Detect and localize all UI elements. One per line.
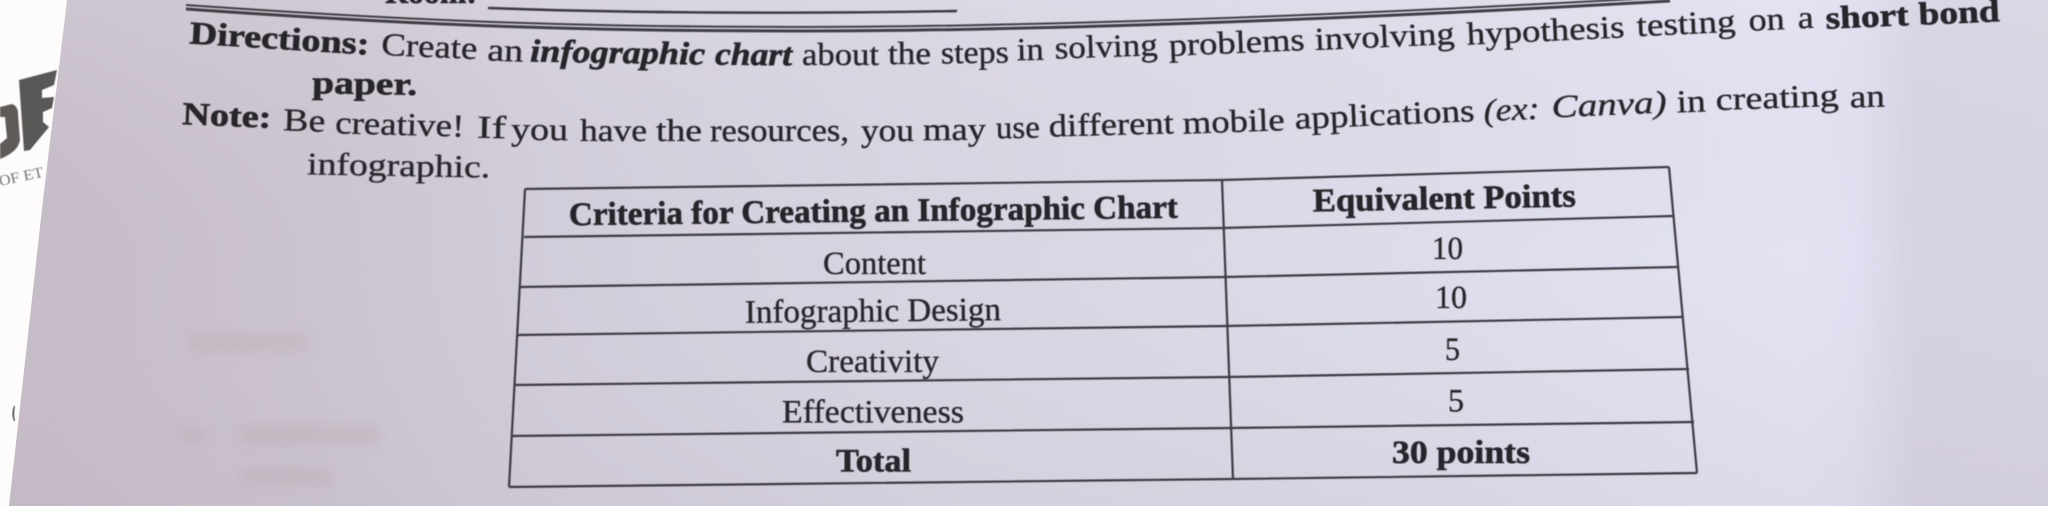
note text: infographic.	[307, 145, 490, 185]
row: infographic design: 10	[1435, 280, 1467, 316]
note text: resources,	[710, 112, 849, 148]
logo fragment on the page behind	[0, 70, 57, 421]
logo letter J	[0, 104, 20, 159]
criteria table	[509, 167, 1697, 487]
directions text: Create	[381, 26, 478, 66]
note text: (ex:	[1483, 90, 1540, 128]
note text: applications	[1294, 92, 1475, 136]
row: creativity: 5	[1445, 332, 1460, 368]
directions text: testing	[1636, 3, 1736, 43]
header row: Equivalent Points	[1312, 178, 1576, 220]
table grid	[509, 167, 1697, 487]
directions text: involving	[1314, 15, 1455, 57]
header row: Criteria for Creating an Infographic Chart	[569, 190, 1178, 233]
note text: you	[511, 111, 568, 147]
directions text: on	[1748, 0, 1785, 38]
row: total	[836, 435, 1530, 480]
note text: Note:	[182, 95, 272, 135]
header row	[569, 178, 1576, 233]
row: infographic design: Infographic Design	[745, 292, 1001, 331]
header fill-in line	[488, 8, 957, 13]
directions text: an	[487, 31, 524, 69]
double header rule	[186, 0, 1670, 31]
note text: you	[861, 112, 914, 148]
note text: may	[923, 111, 986, 147]
directions text: infographic	[530, 32, 705, 72]
row: creativity	[806, 332, 1460, 380]
note text: mobile	[1182, 101, 1285, 141]
directions text: in	[1016, 31, 1044, 67]
row: effectiveness: Effectiveness	[782, 394, 964, 430]
note text: the	[656, 112, 702, 148]
logo letter F	[19, 70, 57, 151]
row: total: 30 points	[1392, 435, 1530, 471]
note text: Be	[283, 101, 326, 139]
directions text: steps	[941, 34, 1009, 70]
row: creativity: Creativity	[806, 344, 940, 380]
note text: have	[580, 112, 647, 148]
directions text: the	[888, 35, 931, 71]
background: white surface left of the sheet	[0, 0, 120, 506]
directions text: solving	[1054, 26, 1158, 66]
note text: Canva)	[1551, 84, 1667, 125]
directions text: hypothesis	[1466, 8, 1625, 52]
directions text: chart	[715, 36, 793, 72]
row: infographic design	[745, 280, 1467, 331]
faint show-through text on paper	[177, 335, 380, 486]
small mark	[12, 406, 15, 421]
directions text: problems	[1168, 21, 1305, 63]
note text: different	[1048, 104, 1174, 144]
row: content: 10	[1432, 231, 1463, 267]
row: total: Total	[836, 444, 911, 480]
row: content: Content	[823, 246, 926, 282]
row: content	[823, 231, 1463, 282]
note text: If	[477, 109, 507, 145]
note text: an	[1849, 78, 1885, 114]
note text: creating	[1715, 77, 1839, 117]
note text: creative!	[335, 104, 465, 144]
directions text: about	[802, 36, 879, 72]
note text: use	[995, 109, 1040, 145]
row: effectiveness	[782, 384, 1464, 430]
note text	[182, 77, 1885, 185]
row: effectiveness: 5	[1448, 384, 1464, 420]
directions text	[189, 0, 2001, 102]
directions text: Directions:	[189, 14, 371, 62]
note text: in	[1676, 82, 1706, 119]
directions text: paper.	[312, 64, 417, 102]
